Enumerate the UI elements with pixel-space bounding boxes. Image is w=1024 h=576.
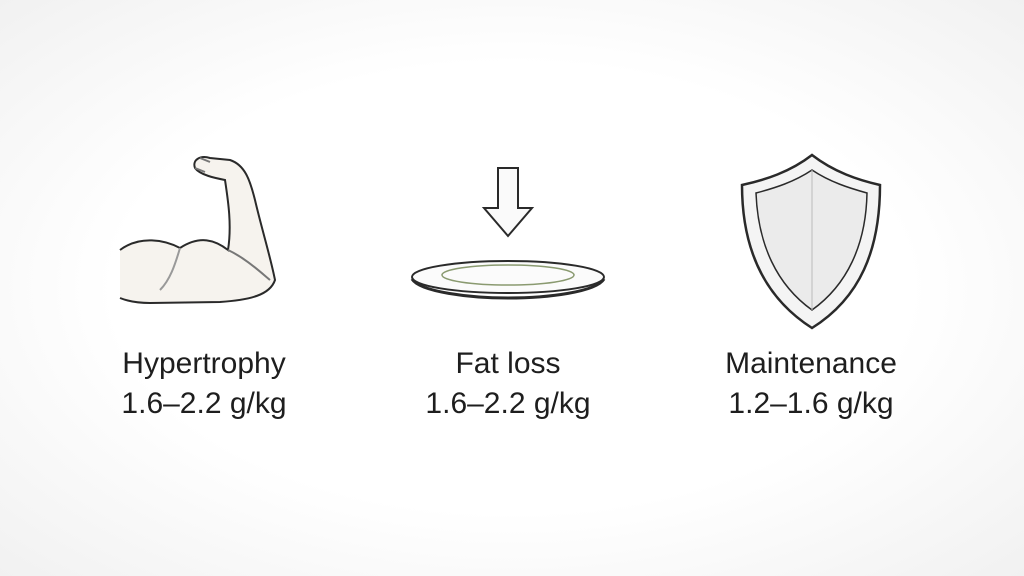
icon: flexed bicep bbox=[120, 157, 275, 303]
icon: plate bbox=[412, 261, 604, 298]
label: maintenance: Maintenance bbox=[725, 347, 897, 380]
icon: shield bbox=[742, 155, 880, 328]
label: hypertrophy: Hypertrophy bbox=[122, 347, 286, 380]
label: maintenance bbox=[725, 347, 897, 420]
label: maintenance: 1.2–1.6 g/kg bbox=[728, 387, 894, 420]
label: hypertrophy: 1.6–2.2 g/kg bbox=[121, 387, 287, 420]
label: fat loss: Fat loss bbox=[455, 347, 561, 380]
label: fat loss bbox=[425, 347, 591, 420]
label: hypertrophy bbox=[121, 347, 287, 420]
icon: arrow down bbox=[484, 168, 532, 236]
label: fat loss: 1.6–2.2 g/kg bbox=[425, 387, 591, 420]
